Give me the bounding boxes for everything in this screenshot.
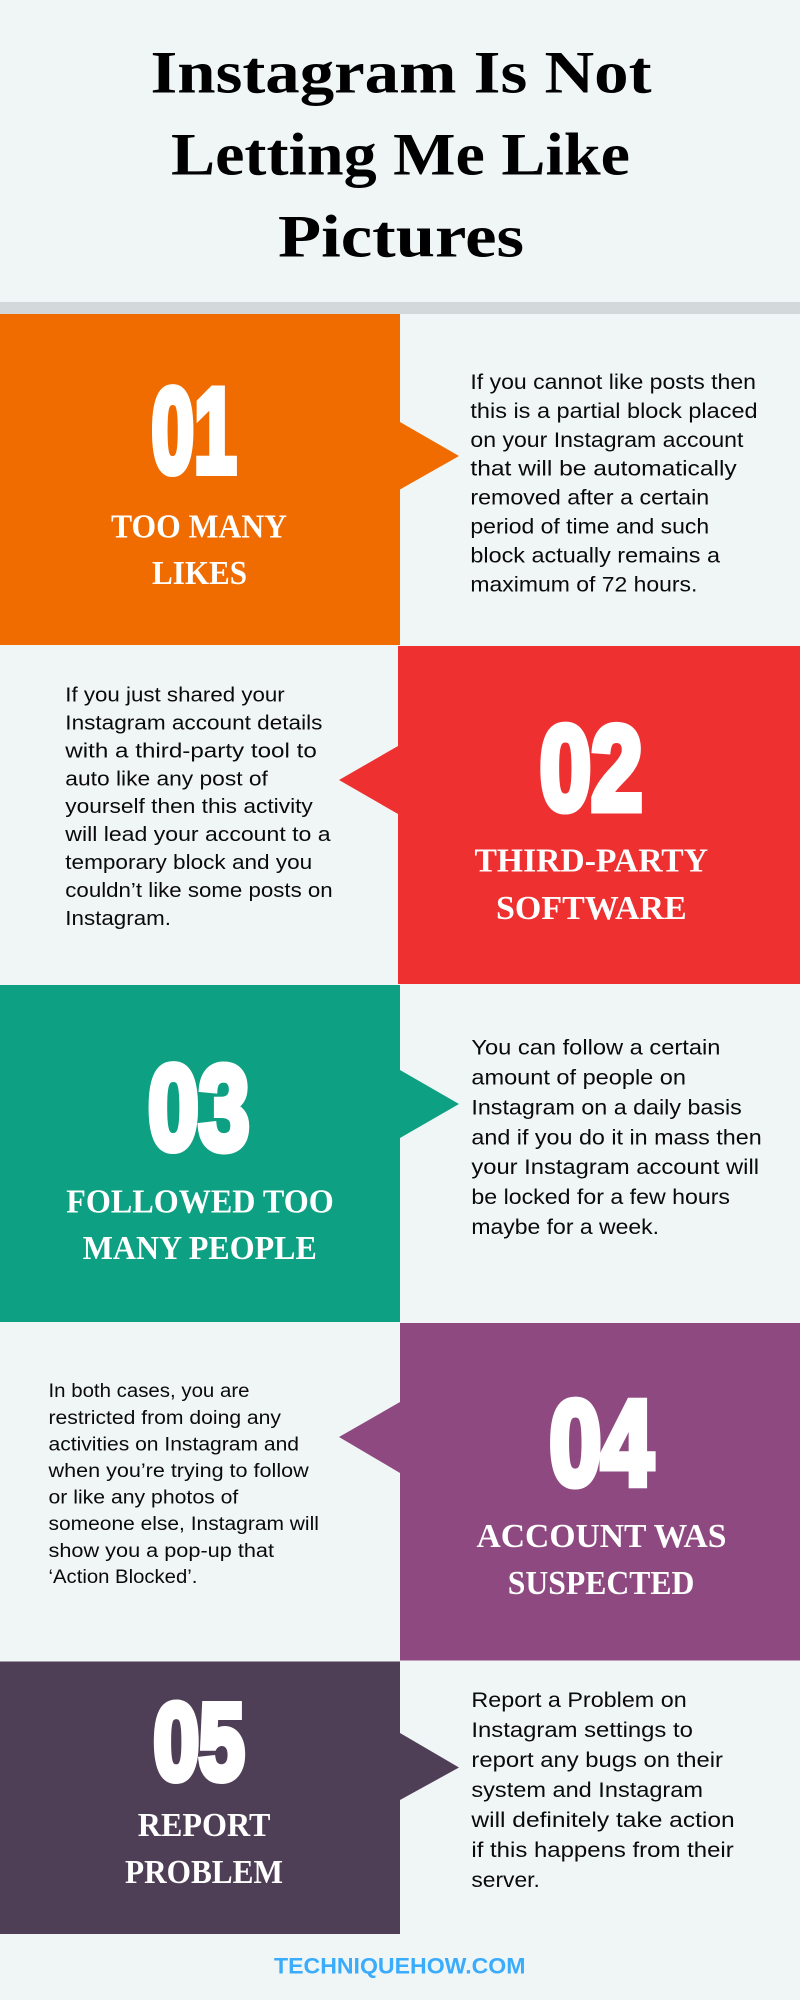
text block: report problem: system and Instagram [471,1778,703,1802]
heading: account was suspected: ACCOUNT WAS [476,1518,726,1555]
text block: account was suspected: restricted from doing any [48,1408,282,1429]
text block: report problem: will definitely take action [470,1808,735,1832]
title: Letting Me Like [171,122,630,188]
text block: account was suspected [47,1381,319,1588]
panel: 03 followed too many people [0,985,762,1322]
text block: report problem: Instagram settings to [471,1718,693,1742]
panel: 02 third-party software [64,646,800,984]
heading: report problem: PROBLEM [125,1854,283,1891]
title: Pictures [278,204,524,270]
number 03: 03 [148,1041,250,1175]
text block: too many likes: maximum of 72 hours. [470,572,697,596]
number 01: 01 [152,364,236,498]
text block: third-party software: If you just shared your [65,684,285,707]
heading: account was suspected: SUSPECTED [508,1565,694,1602]
text block: followed too many people: maybe for a week. [471,1215,659,1239]
text block: followed too many people: Instagram on a daily basis [471,1095,742,1119]
text block: too many likes: this is a partial block placed [470,399,758,423]
text block: followed too many people: your Instagram account will [471,1155,759,1179]
heading: account was suspected [476,1518,726,1602]
heading: followed too many people [66,1183,334,1267]
purple block with arrow [339,1323,800,1660]
text block: account was suspected: ‘Action Blocked’. [48,1567,197,1588]
text block: account was suspected: In both cases, you are [48,1381,250,1402]
text block: third-party software: yourself then this activity [65,795,314,818]
red block with arrow [339,646,800,984]
text block: account was suspected: when you’re trying to follow [47,1461,309,1482]
footer: website: TECHNIQUEHOW.COM [274,1954,526,1978]
teal block with arrow [0,985,459,1322]
text block: report problem [470,1688,735,1892]
heading: report problem: REPORT [138,1807,271,1844]
title: Instagram Is Not [150,40,652,106]
text block: report problem: Report a Problem on [471,1688,687,1712]
text block: account was suspected: or like any photos of [48,1488,239,1509]
text block: followed too many people: be locked for a few hours [471,1185,730,1209]
panel: 01 too many likes [0,314,758,645]
text block: too many likes: removed after a certain [470,486,709,510]
text block: account was suspected: activities on Instagram and [48,1434,299,1455]
title [150,40,652,270]
text block: third-party software: Instagram. [65,907,171,930]
dark block with arrow [0,1662,459,1934]
text block: third-party software: couldn’t like some posts on [65,879,333,902]
text block: too many likes: If you cannot like posts then [470,370,756,394]
text block: too many likes: that will be automatically [470,457,737,481]
text block: account was suspected: someone else, Instagram will [48,1514,319,1535]
text block: third-party software: temporary block and you [65,851,312,874]
text block: third-party software [64,684,333,930]
text block: third-party software: with a third-party tool to [64,739,317,762]
text block: followed too many people: and if you do it in mass then [471,1125,762,1149]
text block: followed too many people: You can follow a certain [471,1035,720,1059]
heading: too many likes: TOO MANY [111,508,287,546]
number 04: 04 [550,1377,653,1511]
text block: third-party software: Instagram account details [65,712,322,734]
text block: report problem: if this happens from their [471,1838,734,1862]
heading: third-party software: THIRD-PARTY [474,843,708,880]
text block: third-party software: will lead your account to a [64,823,331,846]
text block: too many likes [470,370,758,596]
orange block with arrow [0,314,459,645]
text block: too many likes: period of time and such [470,514,709,538]
heading: followed too many people: FOLLOWED TOO [66,1183,334,1220]
text block: followed too many people: amount of people on [471,1065,686,1089]
number 05: 05 [154,1681,244,1802]
heading: third-party software [474,843,708,927]
panel: 05 report problem [0,1662,735,1934]
heading: too many likes [111,508,287,592]
text block: report problem: report any bugs on their [471,1748,723,1772]
heading: third-party software: SOFTWARE [496,890,687,927]
text block: report problem: server. [471,1868,540,1892]
text block: account was suspected: show you a pop-up that [48,1541,275,1562]
text block: too many likes: block actually remains a [470,543,720,567]
panel: 04 account was suspected [47,1323,800,1660]
number 02: 02 [540,702,642,836]
text block: too many likes: on your Instagram account [470,428,743,452]
text block: followed too many people [471,1035,762,1239]
heading: too many likes: LIKES [152,555,247,592]
text block: third-party software: auto like any post of [65,767,268,790]
heading: followed too many people: MANY PEOPLE [83,1230,317,1267]
heading: report problem [125,1807,283,1891]
